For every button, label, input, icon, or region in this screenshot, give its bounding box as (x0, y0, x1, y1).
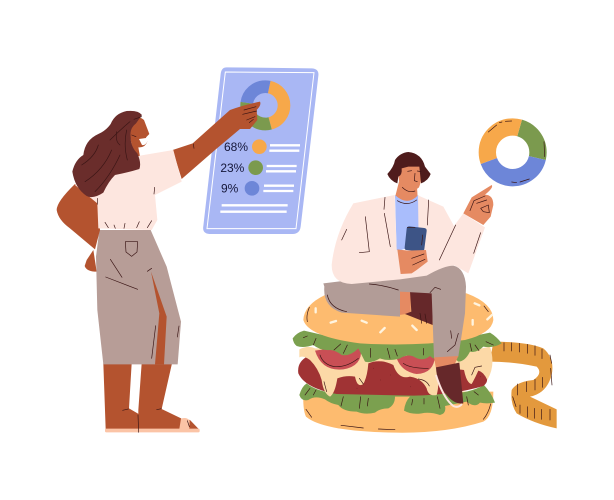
legend: 68%: 68% (224, 140, 248, 154)
bottom lettuce (299, 383, 495, 415)
man shoe, front (436, 363, 463, 404)
tomato slices (315, 348, 435, 374)
man crossed leg (323, 266, 466, 358)
measuring tape (490, 342, 557, 428)
figure: woman (57, 102, 260, 432)
legend: 23%: 23% (220, 161, 245, 175)
man neck and shirt (395, 182, 418, 203)
woman back arm (57, 184, 100, 249)
donut chart: floating (487, 121, 545, 183)
text lines (220, 205, 288, 212)
man head (399, 163, 421, 192)
woman skirt and legs (85, 230, 200, 432)
man hair (387, 152, 431, 183)
man ankle (434, 356, 458, 368)
donut chart: tablet (247, 87, 284, 124)
woman raised arm (173, 102, 260, 179)
legend: 9% (221, 181, 294, 196)
legend: 9%: 9% (221, 182, 239, 196)
sesame seeds (316, 303, 492, 332)
man pointing hand (463, 185, 493, 225)
top bun (303, 289, 493, 344)
legend: 23% (220, 160, 297, 175)
legend: 68% (224, 139, 300, 154)
top lettuce (293, 331, 502, 362)
cheese (299, 347, 492, 397)
patty (298, 354, 487, 396)
man lower leg and shoe, back (399, 291, 411, 315)
man hand holding phone (397, 249, 428, 274)
woman hair (72, 111, 142, 197)
burger detail lines (303, 306, 493, 430)
man phone (405, 226, 427, 251)
figure: burger (293, 289, 557, 433)
woman neck and face (127, 117, 153, 170)
figure: man (323, 266, 466, 407)
woman shirt (75, 150, 182, 230)
bottom bun (303, 392, 493, 433)
panel: data tablet (203, 67, 318, 234)
man coat (332, 195, 485, 284)
man coat detail lines (342, 197, 481, 260)
